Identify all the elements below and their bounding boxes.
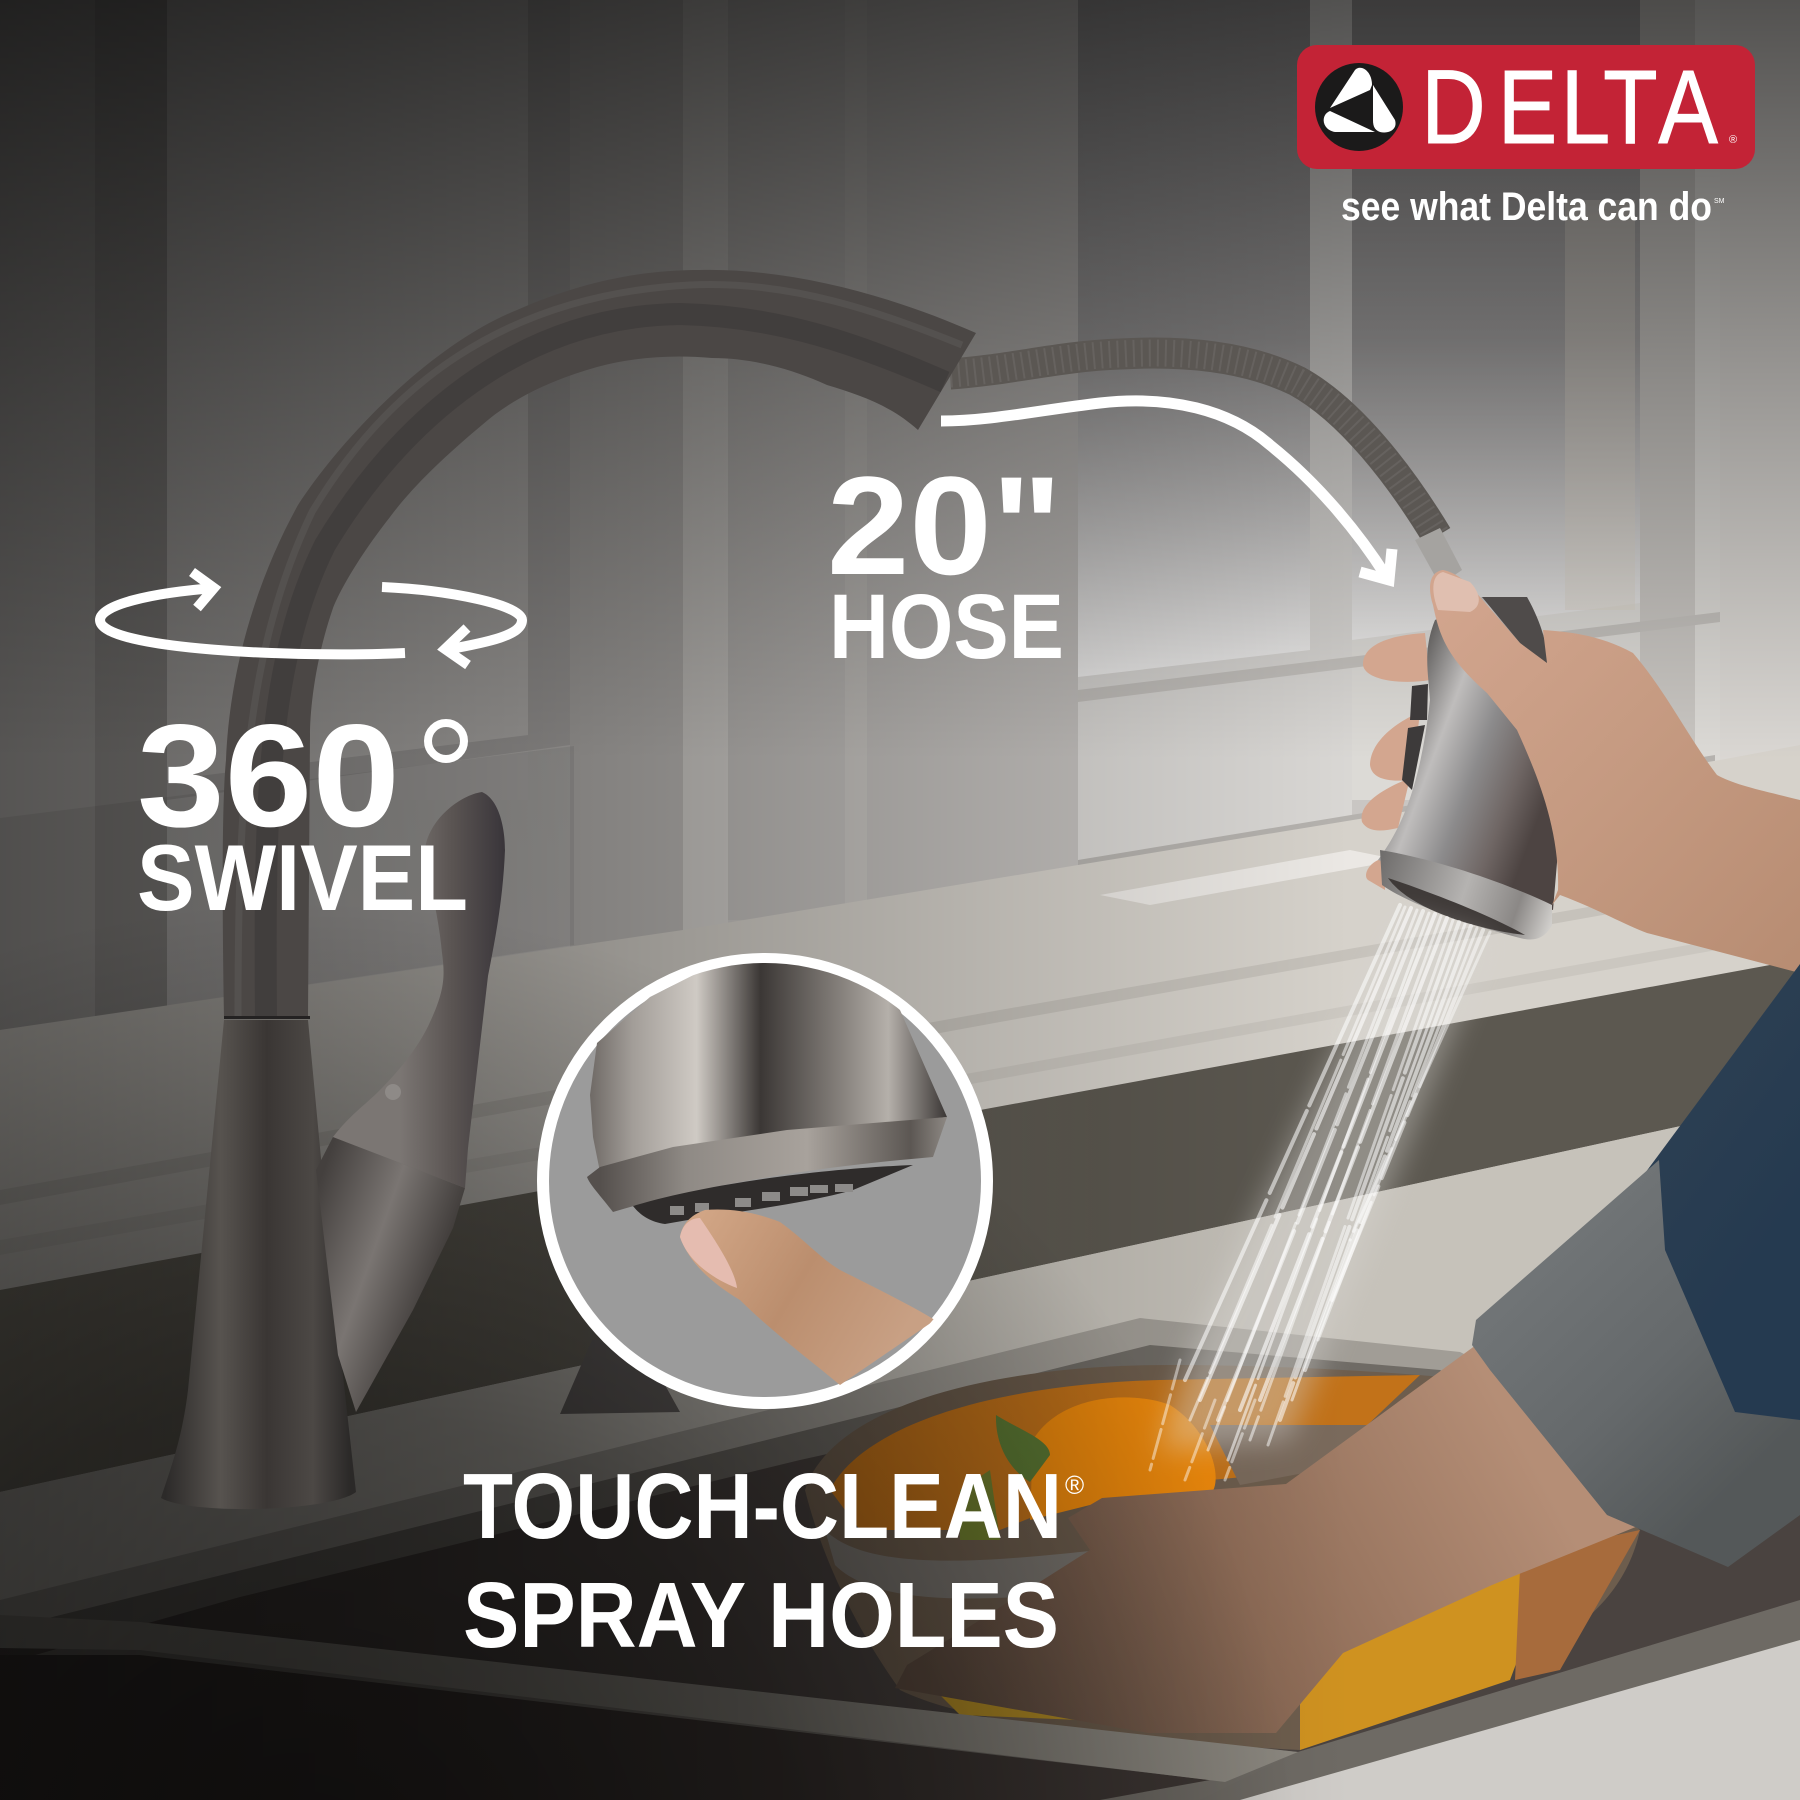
inset spray ring — [587, 1117, 947, 1212]
countertop — [0, 1100, 1800, 1800]
front rim left — [0, 1615, 1298, 1782]
thumb and palm — [1430, 570, 1800, 973]
icon: rotation arrows — [100, 572, 522, 665]
sink rim — [0, 1318, 1800, 1800]
water spray — [1150, 905, 1490, 1480]
overlay: top shade — [0, 0, 1800, 760]
inset fingernail — [680, 1218, 737, 1288]
hose connector — [1415, 528, 1462, 585]
sink basin — [0, 1385, 1800, 1752]
window pane right — [1352, 0, 1640, 640]
degree sign — [428, 723, 464, 759]
window pane left — [1078, 0, 1310, 677]
tagline: see what Delta can do — [1341, 185, 1712, 229]
soap dispenser base — [560, 1340, 680, 1414]
fingers behind head — [1362, 633, 1430, 890]
callout: 360 degree swivel — [100, 572, 522, 930]
inset: touch-clean spray detail — [543, 955, 987, 1403]
arrow along hose — [941, 401, 1392, 580]
spray buttons — [1402, 684, 1428, 790]
inset nozzle face — [633, 1165, 913, 1224]
spray head — [1378, 597, 1560, 910]
hose — [950, 353, 1462, 585]
faucet hub — [316, 1137, 465, 1412]
label: swivel: SWIVEL — [137, 825, 468, 930]
shirt sleeve — [1472, 964, 1800, 1567]
callout: 20 inch hose — [827, 401, 1392, 678]
faucet neck — [223, 270, 976, 1018]
front rim right — [1200, 1600, 1800, 1800]
overlay: bottom shade — [0, 900, 1800, 1800]
sink basin dark lower-left — [0, 1655, 1210, 1800]
logo: Delta: SM — [1714, 198, 1725, 205]
denim shirt — [1640, 964, 1800, 1440]
logo mark — [1315, 63, 1403, 151]
caption: touch-clean spray holes — [463, 1454, 1084, 1667]
caption: touch-clean spray holes: TOUCH-CLEAN — [463, 1454, 1062, 1558]
inset finger — [680, 1210, 935, 1385]
inset spray head body — [590, 955, 947, 1172]
faucet — [161, 270, 976, 1509]
grey cuff — [1472, 1160, 1800, 1567]
hand holding spray head — [1362, 570, 1800, 973]
spray ring — [1380, 850, 1552, 939]
heading: 360: 360 — [137, 694, 400, 857]
logo wordmark: DELTA — [1421, 48, 1718, 166]
lower arm and hand — [895, 1345, 1648, 1733]
faucet lever — [333, 792, 505, 1188]
label: hose: HOSE — [829, 576, 1064, 678]
faucet base — [161, 1020, 356, 1509]
granite backsplash — [0, 960, 1800, 1492]
caption: touch-clean spray holes: SPRAY HOLES — [463, 1563, 1059, 1667]
logo: Delta: ® — [1729, 134, 1737, 146]
logo: Delta — [1297, 45, 1755, 229]
logo panel — [1297, 45, 1755, 169]
strainer bowl — [805, 1365, 1640, 1750]
caption: touch-clean spray holes: ® — [1065, 1470, 1084, 1500]
window ledge — [0, 745, 1800, 1290]
heading: 20 inches: 20" — [827, 447, 1062, 604]
